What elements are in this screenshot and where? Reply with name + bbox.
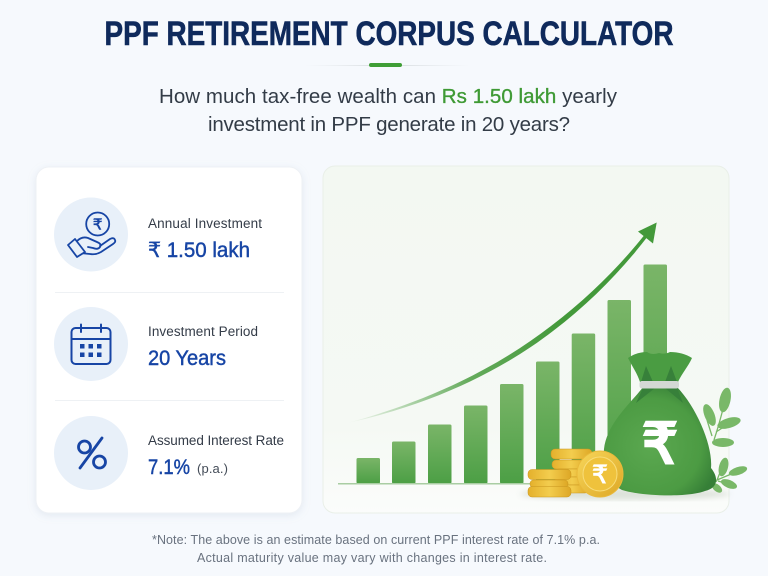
icon: hand holding rupee coin: [54, 198, 128, 272]
subtitle: investment in PPF generate in 20 years?: [208, 113, 570, 136]
label: Investment Period: [148, 324, 258, 339]
icon: coin stacks: [528, 449, 623, 497]
row: annual investment: [54, 198, 262, 272]
rupee symbol: ₹: [642, 412, 678, 475]
ground shadow: [520, 488, 730, 500]
subtitle: [159, 85, 618, 136]
title divider: [305, 63, 470, 67]
subtitle: How much tax-free wealth can Rs 1.50 lakh yearly: [159, 85, 618, 108]
value: 7.1%: [148, 456, 190, 479]
footnote: *Note: The above is an estimate based on current PPF interest rate of 7.1% p.a.: [152, 533, 600, 547]
panel: growth illustration: [323, 166, 748, 513]
footnote: [152, 533, 600, 565]
label: Annual Investment: [148, 216, 262, 231]
icon: rupee coin: ₹: [592, 461, 608, 489]
panel: inputs card: [36, 167, 302, 513]
icon: money bag: [604, 352, 716, 495]
row: investment period: [54, 307, 258, 381]
unit: (p.a.): [197, 461, 228, 476]
value: 20 Years: [148, 347, 226, 370]
icon: hand holding rupee coin: ₹: [93, 216, 103, 234]
arrow: growth curve: [347, 222, 657, 423]
icon: percent: [54, 416, 128, 490]
icon: leaves: [701, 387, 748, 495]
icon: calendar: [54, 307, 128, 381]
label: Assumed Interest Rate: [148, 433, 284, 448]
bar chart: [356, 264, 667, 484]
value: ₹ 1.50 lakh: [148, 239, 250, 262]
row: assumed interest rate: [54, 416, 284, 490]
footnote: Actual maturity value may vary with changes in interest rate.: [197, 551, 547, 565]
